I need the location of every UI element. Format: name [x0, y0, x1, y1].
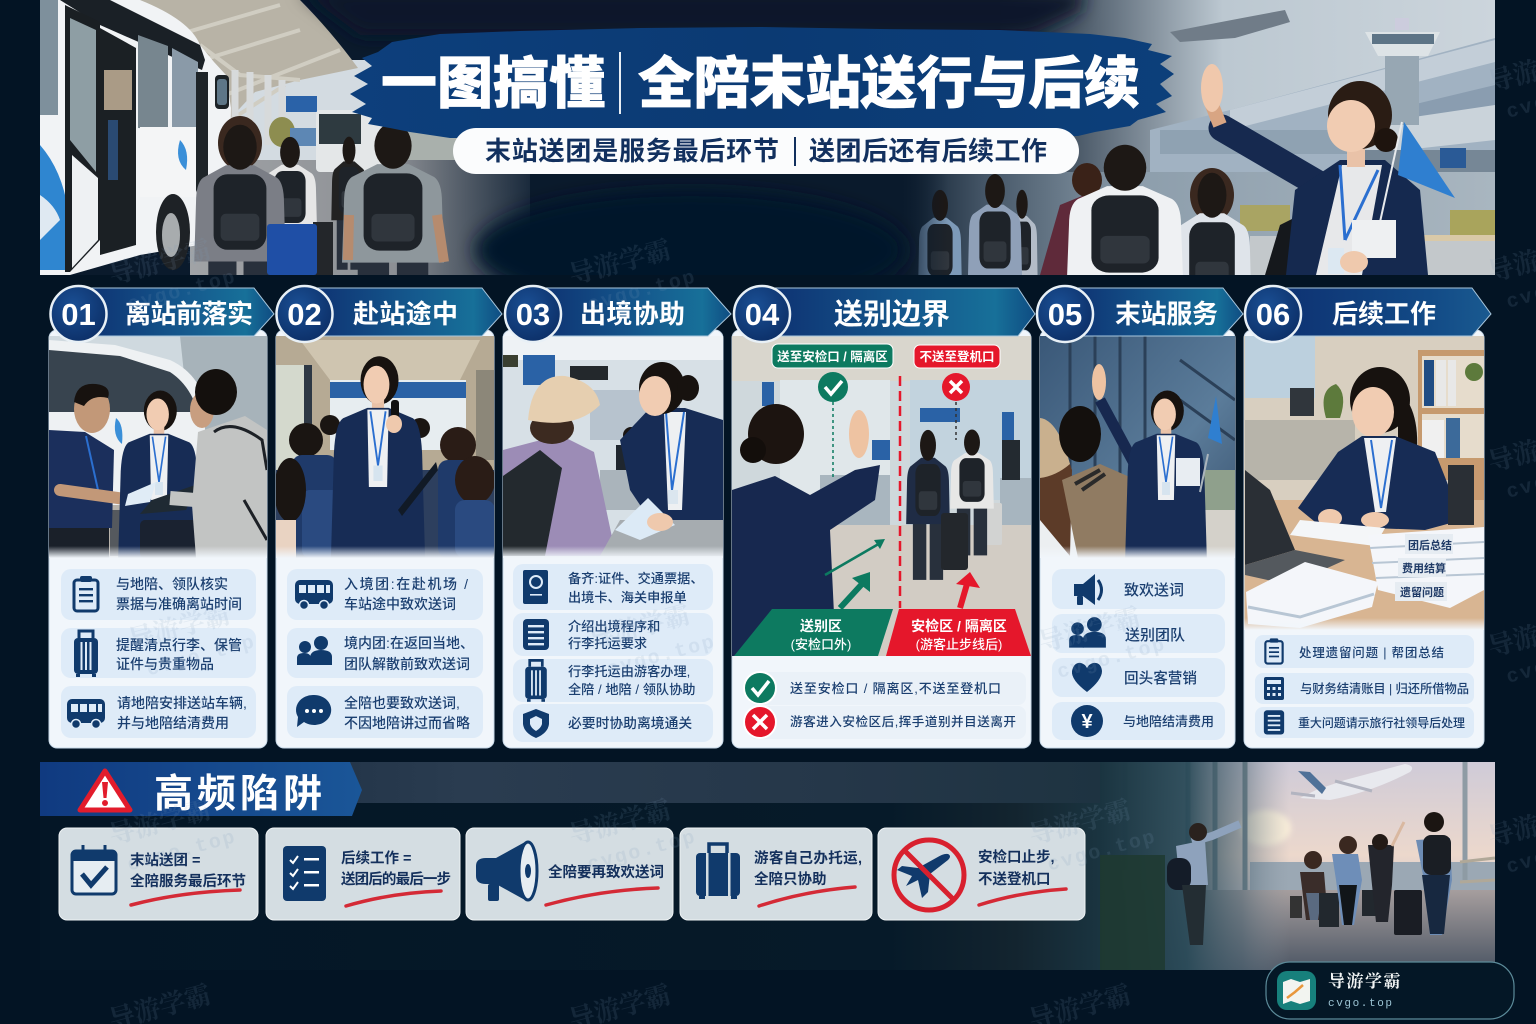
text: cvgo.top [604, 631, 719, 682]
item: settle accounts [1255, 673, 1474, 704]
item: verify tickets: 票据与准确离站时间 [116, 596, 242, 612]
photo: guide waves to group [1040, 336, 1235, 558]
icon: checklist [283, 846, 326, 901]
subtitle pill [453, 128, 1079, 174]
panel 06: follow-up work [1244, 330, 1484, 748]
text: cvgo.top [1045, 826, 1159, 877]
text: 导游学霸 [1036, 603, 1144, 657]
trap card 1: 末站送团 = [130, 851, 200, 869]
header ribbon 04 [734, 286, 1035, 342]
icon: suitcase [696, 844, 740, 899]
item: verify tickets [61, 569, 256, 620]
traps section backdrop [40, 762, 1100, 970]
icon: folded map [1277, 971, 1316, 1010]
zone: farewell area: 送别区 [800, 618, 842, 634]
item: see off group: 送别团队 [1125, 627, 1185, 644]
header ribbon 01: 01 [61, 297, 96, 332]
item: check luggage: 证件与贵重物品 [116, 656, 214, 672]
text: 导游学霸 [566, 235, 674, 290]
item: verify tickets: 与地陪、领队核实 [116, 576, 228, 592]
boundary tag: see off to security: 送至安检口 / 隔离区 [777, 349, 888, 364]
header ribbon 04: 04 [745, 297, 780, 332]
text: cvgo.top [585, 266, 699, 317]
panel 01: before leaving [49, 330, 267, 748]
photo: security checkpoint farewell [732, 336, 1031, 656]
main title [381, 52, 1140, 115]
main title: 全陪末站送行与后续 [638, 52, 1140, 115]
item: repeat customers [1052, 658, 1225, 697]
header ribbon 03: 出境协助 [580, 299, 685, 329]
photo: guide checks tickets with local guide [49, 336, 267, 558]
rule row: do not: 游客进入安检区后,挥手道别并目送离开 [790, 714, 1016, 729]
trap card 2: 后续工作 = [341, 850, 412, 867]
red underline stroke [346, 891, 441, 906]
header ribbon 02: 赴站途中 [353, 299, 458, 329]
header ribbon 05: 末站服务 [1115, 299, 1218, 329]
item: settle fees: ¥ [1081, 711, 1093, 733]
text: 导游学霸 [106, 795, 214, 850]
zone: security area: 安检区 / 隔离区 [911, 618, 1007, 634]
item: check luggage [61, 628, 256, 678]
trap card 2 [266, 828, 460, 920]
header ribbon 06 [1245, 286, 1491, 342]
red underline stroke [131, 890, 240, 905]
text: cvgo.top [144, 631, 259, 682]
item: inbound group [287, 569, 483, 620]
header ribbon 06: 06 [1256, 297, 1290, 332]
zone: security area: (游客止步线后) [916, 637, 1002, 652]
item: documents [513, 564, 713, 610]
arrow: red to security zone [956, 572, 980, 608]
header ribbon 02 [276, 286, 502, 342]
header ribbon 05 [1037, 286, 1243, 342]
panel 03: exit assistance [503, 330, 723, 748]
item: inbound group: 车站途中致欢送词 [344, 596, 456, 612]
red underline stroke [979, 889, 1066, 905]
icon: calendar check [72, 845, 116, 894]
main title: 一图搞懂 [381, 52, 605, 115]
title brush banner [350, 27, 1174, 138]
text: cvgo.top [125, 826, 239, 877]
text: 导游学霸 [566, 795, 674, 850]
subtitle pill: 末站送团是服务最后环节 [485, 136, 779, 166]
item: tour escort also speaks [287, 686, 483, 738]
hero banner photo [40, 0, 1495, 275]
item: domestic group: 境内团:在返回当地、 [344, 635, 474, 651]
trap card 5: 不送登机口 [978, 871, 1050, 888]
item: farewell speech: 致欢送词 [1124, 582, 1184, 599]
trap card 2: 送团后的最后一步 [341, 870, 451, 888]
text: 导游学霸 [1026, 795, 1134, 850]
trap card 4: 全陪只协助 [754, 870, 826, 888]
item: major issues [1255, 707, 1474, 738]
zone: farewell area [734, 609, 893, 656]
trap card 5 [878, 828, 1085, 920]
bottom photo: group departure at sunset [1100, 762, 1495, 970]
item: exit procedure: 介绍出境程序和 [568, 618, 660, 634]
text: cvgo.top [1055, 634, 1169, 685]
photo: guide doing paperwork [1244, 336, 1484, 630]
rule row: do: 送至安检口 / 隔离区,不送至登机口 [790, 681, 1001, 696]
icon: no boarding plane [894, 840, 964, 910]
item: settle accounts: 与财务结清账目 | 归还所借物品 [1300, 681, 1469, 696]
trap card 3 [466, 828, 673, 920]
left scene: coach and travellers [40, 0, 530, 345]
item: domestic group: 团队解散前致欢送词 [344, 656, 470, 672]
item: check-in by traveller [513, 659, 713, 702]
trap card 4: 游客自己办托运, [754, 849, 862, 867]
header ribbon 01 [50, 286, 274, 342]
header ribbon 03: 03 [516, 297, 550, 332]
boundary tag: not to boarding gate [914, 345, 1000, 368]
brand logo box: cvgo.top [1328, 998, 1394, 1010]
item: exit procedure: 行李托运要求 [568, 636, 647, 651]
header ribbon 03 [505, 286, 731, 342]
icon: megaphone [476, 842, 537, 901]
trap card 3: 全陪要再致欢送词 [548, 863, 664, 881]
brand logo box [1266, 962, 1514, 1019]
item: settle fees [1052, 702, 1225, 740]
traps band background [40, 762, 1100, 803]
header ribbon 02: 02 [287, 297, 322, 332]
item: tour escort also speaks: 全陪也要致欢送词, [344, 695, 460, 711]
right scene: airport and waving guide [900, 0, 1495, 390]
photo: guide speaking on coach [276, 336, 494, 558]
section heading: frequent traps: 高频陷阱 [154, 773, 322, 816]
subtitle pill: 送团后还有后续工作 [809, 136, 1047, 166]
zone: farewell area: (安检口外) [791, 637, 851, 652]
text: cvgo.top [125, 266, 239, 317]
item: settle fees: 与地陪结清费用 [1123, 714, 1214, 729]
item: domestic group [287, 628, 483, 678]
trap card 5: 安检口止步, [978, 848, 1055, 866]
text: 导游学霸 [106, 235, 214, 290]
arrow: green to farewell zone [840, 572, 870, 608]
text: 导游学霸 [585, 600, 693, 655]
photo: assisting traveller at counter [503, 336, 723, 558]
item: check-in by traveller: 全陪 / 地陪 / 领队协助 [568, 681, 695, 697]
item: arrange vehicle: 请地陪安排送站车辆, [117, 695, 247, 711]
red underline stroke [546, 888, 658, 905]
text: cvgo.top [585, 826, 699, 877]
icon: red cross [942, 373, 970, 401]
item: documents: 备齐:证件、交通票据、 [568, 570, 704, 586]
trap card 1: 全陪服务最后环节 [130, 872, 246, 890]
panel 05: final station service [1040, 330, 1235, 748]
red underline stroke [759, 887, 855, 906]
panel 02: on the way [274, 330, 495, 748]
header ribbon 01: 离站前落实 [125, 299, 253, 329]
trap card 4 [680, 828, 872, 920]
item: tour escort also speaks: 不因地陪讲过而省略 [344, 715, 470, 731]
item: inbound group: 入境团:在赴机场 / [344, 576, 468, 592]
item: customs clearance: 必要时协助离境通关 [568, 715, 692, 731]
icon: green check [818, 372, 848, 402]
brand logo box: 导游学霸 [1328, 972, 1402, 991]
item: leftover issues: 处理遗留问题 | 帮团总结 [1299, 645, 1444, 660]
boundary tag: see off to security [772, 344, 893, 368]
header ribbon 06: 后续工作 [1332, 299, 1436, 329]
rule row: do [744, 672, 1026, 705]
photo: guide doing paperwork: 团后总结 [1408, 538, 1452, 552]
item: exit procedure [513, 613, 713, 656]
trap card 1 [59, 828, 258, 920]
item: farewell speech [1052, 569, 1225, 609]
item: check-in by traveller: 行李托运由游客办理, [568, 663, 690, 679]
item: major issues: 重大问题请示旅行社领导后处理 [1298, 715, 1465, 730]
boundary tag: not to boarding gate: 不送至登机口 [919, 349, 995, 364]
photo: guide doing paperwork: 费用结算 [1402, 561, 1446, 575]
panel 04: farewell boundary [732, 330, 1031, 748]
header ribbon 05: 05 [1048, 297, 1082, 332]
item: check luggage: 提醒清点行李、保管 [116, 637, 242, 653]
item: customs clearance [513, 704, 713, 742]
item: arrange vehicle [61, 686, 256, 738]
header ribbon 04: 送别边界 [834, 298, 950, 331]
rule row: do not [744, 706, 1026, 739]
item: documents: 出境卡、海关申报单 [568, 589, 687, 605]
zone: security area [886, 609, 1031, 656]
section heading: frequent traps [40, 762, 362, 816]
text: 导游学霸 [125, 600, 233, 655]
item: see off group [1052, 614, 1225, 653]
item: repeat customers: 回头客营销 [1124, 669, 1197, 687]
item: arrange vehicle: 并与地陪结清费用 [117, 715, 229, 731]
item: leftover issues [1255, 635, 1474, 668]
photo: guide doing paperwork: 遗留问题 [1400, 585, 1444, 599]
